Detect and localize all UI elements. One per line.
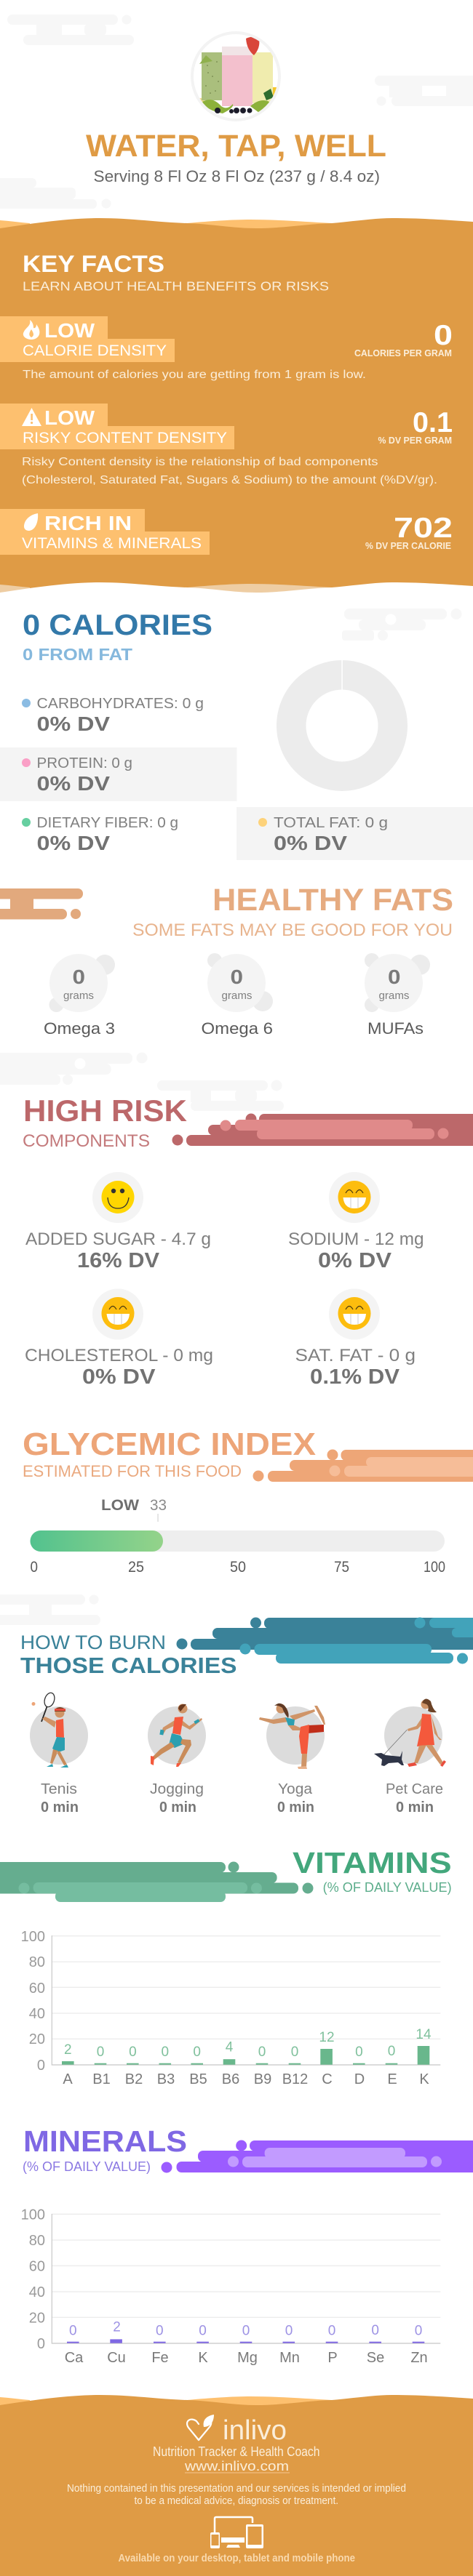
bar chart: vitamins: 0 [193, 2045, 201, 2060]
nutrient: protein: 0% DV [36, 772, 110, 795]
bar chart: minerals: 0 [199, 2324, 207, 2339]
component: cholesterol [25, 1288, 213, 1389]
activity: pet care [374, 1698, 446, 1815]
bar chart: minerals: Ca [65, 2350, 84, 2366]
bar chart: vitamins: 0 [97, 2045, 104, 2060]
logo: inlivo [187, 2415, 287, 2446]
bar chart: minerals: 2 [113, 2320, 121, 2335]
gauge scale [31, 1559, 445, 1576]
bar chart: vitamins: 0 [355, 2045, 363, 2060]
availability note: Available on your desktop, tablet and mobile phone [118, 2552, 355, 2564]
bar chart: minerals: P [327, 2350, 338, 2366]
bar chart: minerals: 0 [156, 2324, 164, 2339]
website: www.inlivo.com [184, 2459, 289, 2473]
fact: rich in vitamins and minerals: VITAMINS & MINERALS [22, 535, 202, 552]
activity: jogging [148, 1704, 206, 1815]
fat: omega 6 [201, 953, 273, 1038]
panel: calories [0, 609, 473, 860]
disclaimer: Nothing contained in this presentation and our services is intended or implied [67, 2483, 406, 2495]
bar chart: vitamins: D [354, 2071, 365, 2087]
heading: minerals: MINERALS [23, 2124, 187, 2158]
heading: calories: 0 CALORIES [23, 609, 212, 641]
gauge scale: 25 [128, 1559, 144, 1576]
bar chart: vitamins: A [63, 2071, 73, 2087]
fat: omega 3 [44, 954, 115, 1038]
fact: risky content density: Risky Content density is the relationship of bad components [22, 456, 378, 468]
bar chart: minerals: Mn [279, 2350, 300, 2366]
disclaimer: to be a medical advice, diagnosis or treatment. [134, 2495, 338, 2507]
icon: warning [22, 408, 41, 426]
fact: calorie density: CALORIES PER GRAM [354, 348, 452, 358]
food image [191, 31, 281, 121]
component: saturated fat [295, 1288, 416, 1389]
decorative band: vitamins [0, 1861, 313, 1902]
bar chart: vitamins: K [419, 2071, 429, 2087]
fact: risky content density: 0.1 [413, 407, 453, 438]
fat: MUFAs: 0 [388, 966, 400, 988]
fact: risky content density: RISKY CONTENT DENSITY [23, 430, 227, 446]
activity: tennis [30, 1691, 88, 1815]
component: sodium [288, 1172, 424, 1272]
icon: flame [23, 320, 39, 340]
component: sodium: 0% DV [318, 1249, 392, 1272]
decorative band: healthy fats [0, 888, 83, 919]
panel: high risk components [0, 1053, 473, 1389]
activity label: Yoga [278, 1781, 313, 1797]
bar chart: vitamins: 4 [226, 2040, 234, 2055]
activity: tennis: 0 min [41, 1799, 79, 1815]
gauge scale: 50 [230, 1559, 246, 1576]
bar chart: minerals: 20 [29, 2311, 45, 2327]
bar chart: minerals: 100 [21, 2207, 45, 2223]
fact: calorie density: 0 [434, 320, 453, 351]
bar chart: minerals: 0 [371, 2323, 379, 2338]
bar chart: vitamins: 60 [29, 1981, 45, 1997]
bar chart: vitamins: 20 [29, 2031, 45, 2047]
heading: those calories: THOSE CALORIES [20, 1653, 237, 1678]
subheading: SOME FATS MAY BE GOOD FOR YOU [132, 920, 453, 940]
nutrient: carbohydrates: 0% DV [36, 713, 110, 735]
fat: MUFAs [365, 953, 430, 1038]
fact: calorie density: CALORIE DENSITY [23, 342, 167, 359]
fat: MUFAs: MUFAs [367, 1019, 424, 1038]
subheading: LEARN ABOUT HEALTH BENEFITS OR RISKS [23, 279, 329, 294]
bar chart: minerals: 60 [29, 2258, 45, 2274]
icon: grin [338, 1181, 371, 1213]
tagline: Nutrition Tracker & Health Coach [153, 2444, 320, 2459]
bar chart: minerals: 0 [69, 2324, 77, 2339]
bar chart: minerals: 0 [242, 2324, 250, 2339]
gauge scale: 75 [334, 1559, 349, 1576]
bar chart: minerals: 0 [328, 2324, 335, 2339]
bar chart: vitamins: B1 [92, 2071, 111, 2087]
activity: pet care: 0 min [396, 1799, 434, 1815]
bar chart: minerals [21, 2207, 440, 2366]
panel: vitamins [0, 1846, 452, 2087]
gauge label: LOW [101, 1497, 139, 1514]
bar chart: vitamins: 100 [21, 1929, 45, 1945]
bar chart: vitamins: C [322, 2071, 333, 2087]
icon: leaf [24, 513, 38, 531]
panel: how to burn calories [0, 1594, 473, 1815]
activity label: Jogging [150, 1781, 204, 1797]
fat: omega 6: grams [221, 990, 252, 1002]
bar chart: vitamins: 0 [258, 2045, 266, 2060]
component: cholesterol: CHOLESTEROL - 0 mg [25, 1346, 213, 1365]
serving size: Serving 8 Fl Oz 8 Fl Oz (237 g / 8.4 oz) [93, 167, 380, 185]
nutrient: dietary fiber [22, 815, 178, 854]
fact: calorie density [0, 316, 453, 381]
nutrient: dietary fiber: DIETARY FIBER: 0 g [36, 815, 178, 831]
bar chart: minerals: 80 [29, 2233, 45, 2249]
gauge scale: 0 [31, 1559, 38, 1576]
bar chart: minerals: 0 [37, 2336, 45, 2352]
subheading: components: COMPONENTS [23, 1131, 150, 1151]
icon: devices [210, 2517, 263, 2548]
bar chart: minerals: 40 [29, 2284, 45, 2300]
fact: rich in vitamins and minerals [0, 509, 453, 555]
fact: risky content density: (Cholesterol, Saturated Fat, Sugars & Sodium) to the amount (%DV/gr). [22, 474, 437, 486]
panel: minerals [21, 2124, 473, 2366]
icon: grin [102, 1297, 134, 1330]
panel: key facts [0, 218, 473, 598]
fact: rich in vitamins and minerals: % DV PER CALORIE [365, 541, 451, 551]
bar chart: vitamins: 14 [416, 2027, 432, 2042]
fat: omega 6: Omega 6 [201, 1019, 273, 1038]
bar chart: vitamins: B2 [125, 2071, 143, 2087]
bar chart: vitamins: 0 [129, 2045, 137, 2060]
fact: risky content density [0, 404, 453, 486]
panel: healthy fats [0, 883, 453, 1038]
heading: glycemic index: GLYCEMIC INDEX [23, 1427, 316, 1462]
fat: omega 3: grams [63, 990, 94, 1002]
fact: rich in vitamins and minerals: RICH IN [44, 512, 132, 534]
fact: rich in vitamins and minerals: 702 [394, 513, 453, 544]
component: added sugar [25, 1172, 211, 1272]
bar chart: vitamins: 12 [319, 2030, 335, 2045]
activity: jogging: 0 min [159, 1799, 196, 1815]
nutrient: total fat [236, 807, 473, 860]
bar chart: minerals: Zn [410, 2350, 428, 2366]
fat: omega 6: 0 [230, 966, 243, 988]
fact: risky content density: % DV PER GRAM [378, 436, 452, 446]
decorative band: glycemic [253, 1450, 473, 1482]
gauge label [101, 1497, 167, 1522]
fat: MUFAs: grams [378, 990, 409, 1002]
heading: how to burn: HOW TO BURN [20, 1632, 166, 1653]
nutrient: dietary fiber: 0% DV [36, 832, 110, 854]
bar chart: vitamins: 80 [29, 1954, 45, 1970]
bar chart: minerals: 0 [415, 2324, 422, 2339]
logo: inlivo: inlivo [223, 2415, 287, 2446]
activity: yoga: 0 min [277, 1799, 314, 1815]
nutrient: carbohydrates: CARBOHYDRATES: 0 g [36, 696, 204, 712]
heading: healthy fats: HEALTHY FATS [212, 883, 453, 918]
disclaimer [67, 2483, 406, 2507]
panel: glycemic index [23, 1427, 473, 1576]
bar chart: vitamins: E [387, 2071, 397, 2087]
nutrient: carbohydrates [22, 696, 204, 735]
heading: high risk: HIGH RISK [23, 1094, 187, 1128]
bar chart: vitamins: 0 [37, 2058, 45, 2074]
bar chart: vitamins: B6 [222, 2071, 239, 2087]
bar chart: vitamins: B12 [282, 2071, 308, 2087]
decorative band: burn [176, 1617, 473, 1664]
component: sodium: SODIUM - 12 mg [288, 1229, 424, 1249]
bar chart: minerals: K [198, 2350, 208, 2366]
bar chart: vitamins: 40 [29, 2006, 45, 2022]
bar chart: minerals: Mg [237, 2350, 258, 2366]
subheading: ESTIMATED FOR THIS FOOD [23, 1462, 242, 1480]
bar chart: minerals: 0 [285, 2324, 293, 2339]
activity: yoga [259, 1704, 325, 1815]
subheading: (% OF DAILY VALUE) [23, 2159, 151, 2174]
title: WATER, TAP, WELL [86, 129, 386, 164]
component: added sugar: 16% DV [77, 1249, 160, 1272]
gauge bar [31, 1530, 445, 1552]
bar chart: vitamins [21, 1929, 440, 2087]
bar chart: vitamins: 0 [388, 2044, 395, 2059]
bar chart: vitamins: 0 [291, 2045, 298, 2060]
icon: grin [338, 1297, 371, 1330]
fact: calorie density: LOW [44, 319, 95, 342]
component: added sugar: ADDED SUGAR - 4.7 g [25, 1229, 211, 1249]
icon: smiley [102, 1181, 134, 1213]
decorative band: minerals [162, 2140, 473, 2172]
donut chart [291, 659, 393, 777]
decorative band: high risk [172, 1114, 473, 1146]
fat: omega 3: 0 [73, 966, 85, 988]
bar chart: minerals: Fe [151, 2350, 169, 2366]
bar chart: vitamins: B5 [189, 2071, 207, 2087]
gauge scale: 100 [424, 1559, 445, 1576]
nutrient: total fat: 0% DV [274, 832, 347, 854]
subheading: (% OF DAILY VALUE) [323, 1880, 452, 1895]
bar chart: vitamins: B3 [157, 2071, 175, 2087]
component: saturated fat: 0.1% DV [310, 1365, 400, 1389]
nutrient: total fat: TOTAL FAT: 0 g [274, 815, 388, 831]
activity label: Tenis [41, 1781, 77, 1797]
fat: omega 3: Omega 3 [44, 1019, 115, 1038]
bar chart: vitamins: B9 [254, 2071, 271, 2087]
bar chart: vitamins: 2 [64, 2042, 72, 2058]
activity label: Pet Care [386, 1781, 443, 1797]
gauge label: 33 [150, 1497, 167, 1514]
fact: calorie density: The amount of calories you are getting from 1 gram is low. [23, 369, 366, 381]
heading: key facts: KEY FACTS [23, 251, 164, 277]
nutrient: protein: PROTEIN: 0 g [36, 755, 132, 771]
header [86, 24, 386, 185]
bar chart: vitamins: 0 [162, 2045, 169, 2060]
subheading: from fat: 0 FROM FAT [23, 645, 132, 664]
heading: vitamins: VITAMINS [293, 1846, 452, 1879]
component: saturated fat: SAT. FAT - 0 g [295, 1346, 416, 1365]
component: cholesterol: 0% DV [82, 1365, 156, 1389]
bar chart: minerals: Cu [107, 2350, 126, 2366]
fact: risky content density: LOW [44, 406, 95, 429]
bar chart: minerals: Se [367, 2350, 384, 2366]
footer [0, 2395, 473, 2576]
nutrient: protein [0, 747, 237, 801]
